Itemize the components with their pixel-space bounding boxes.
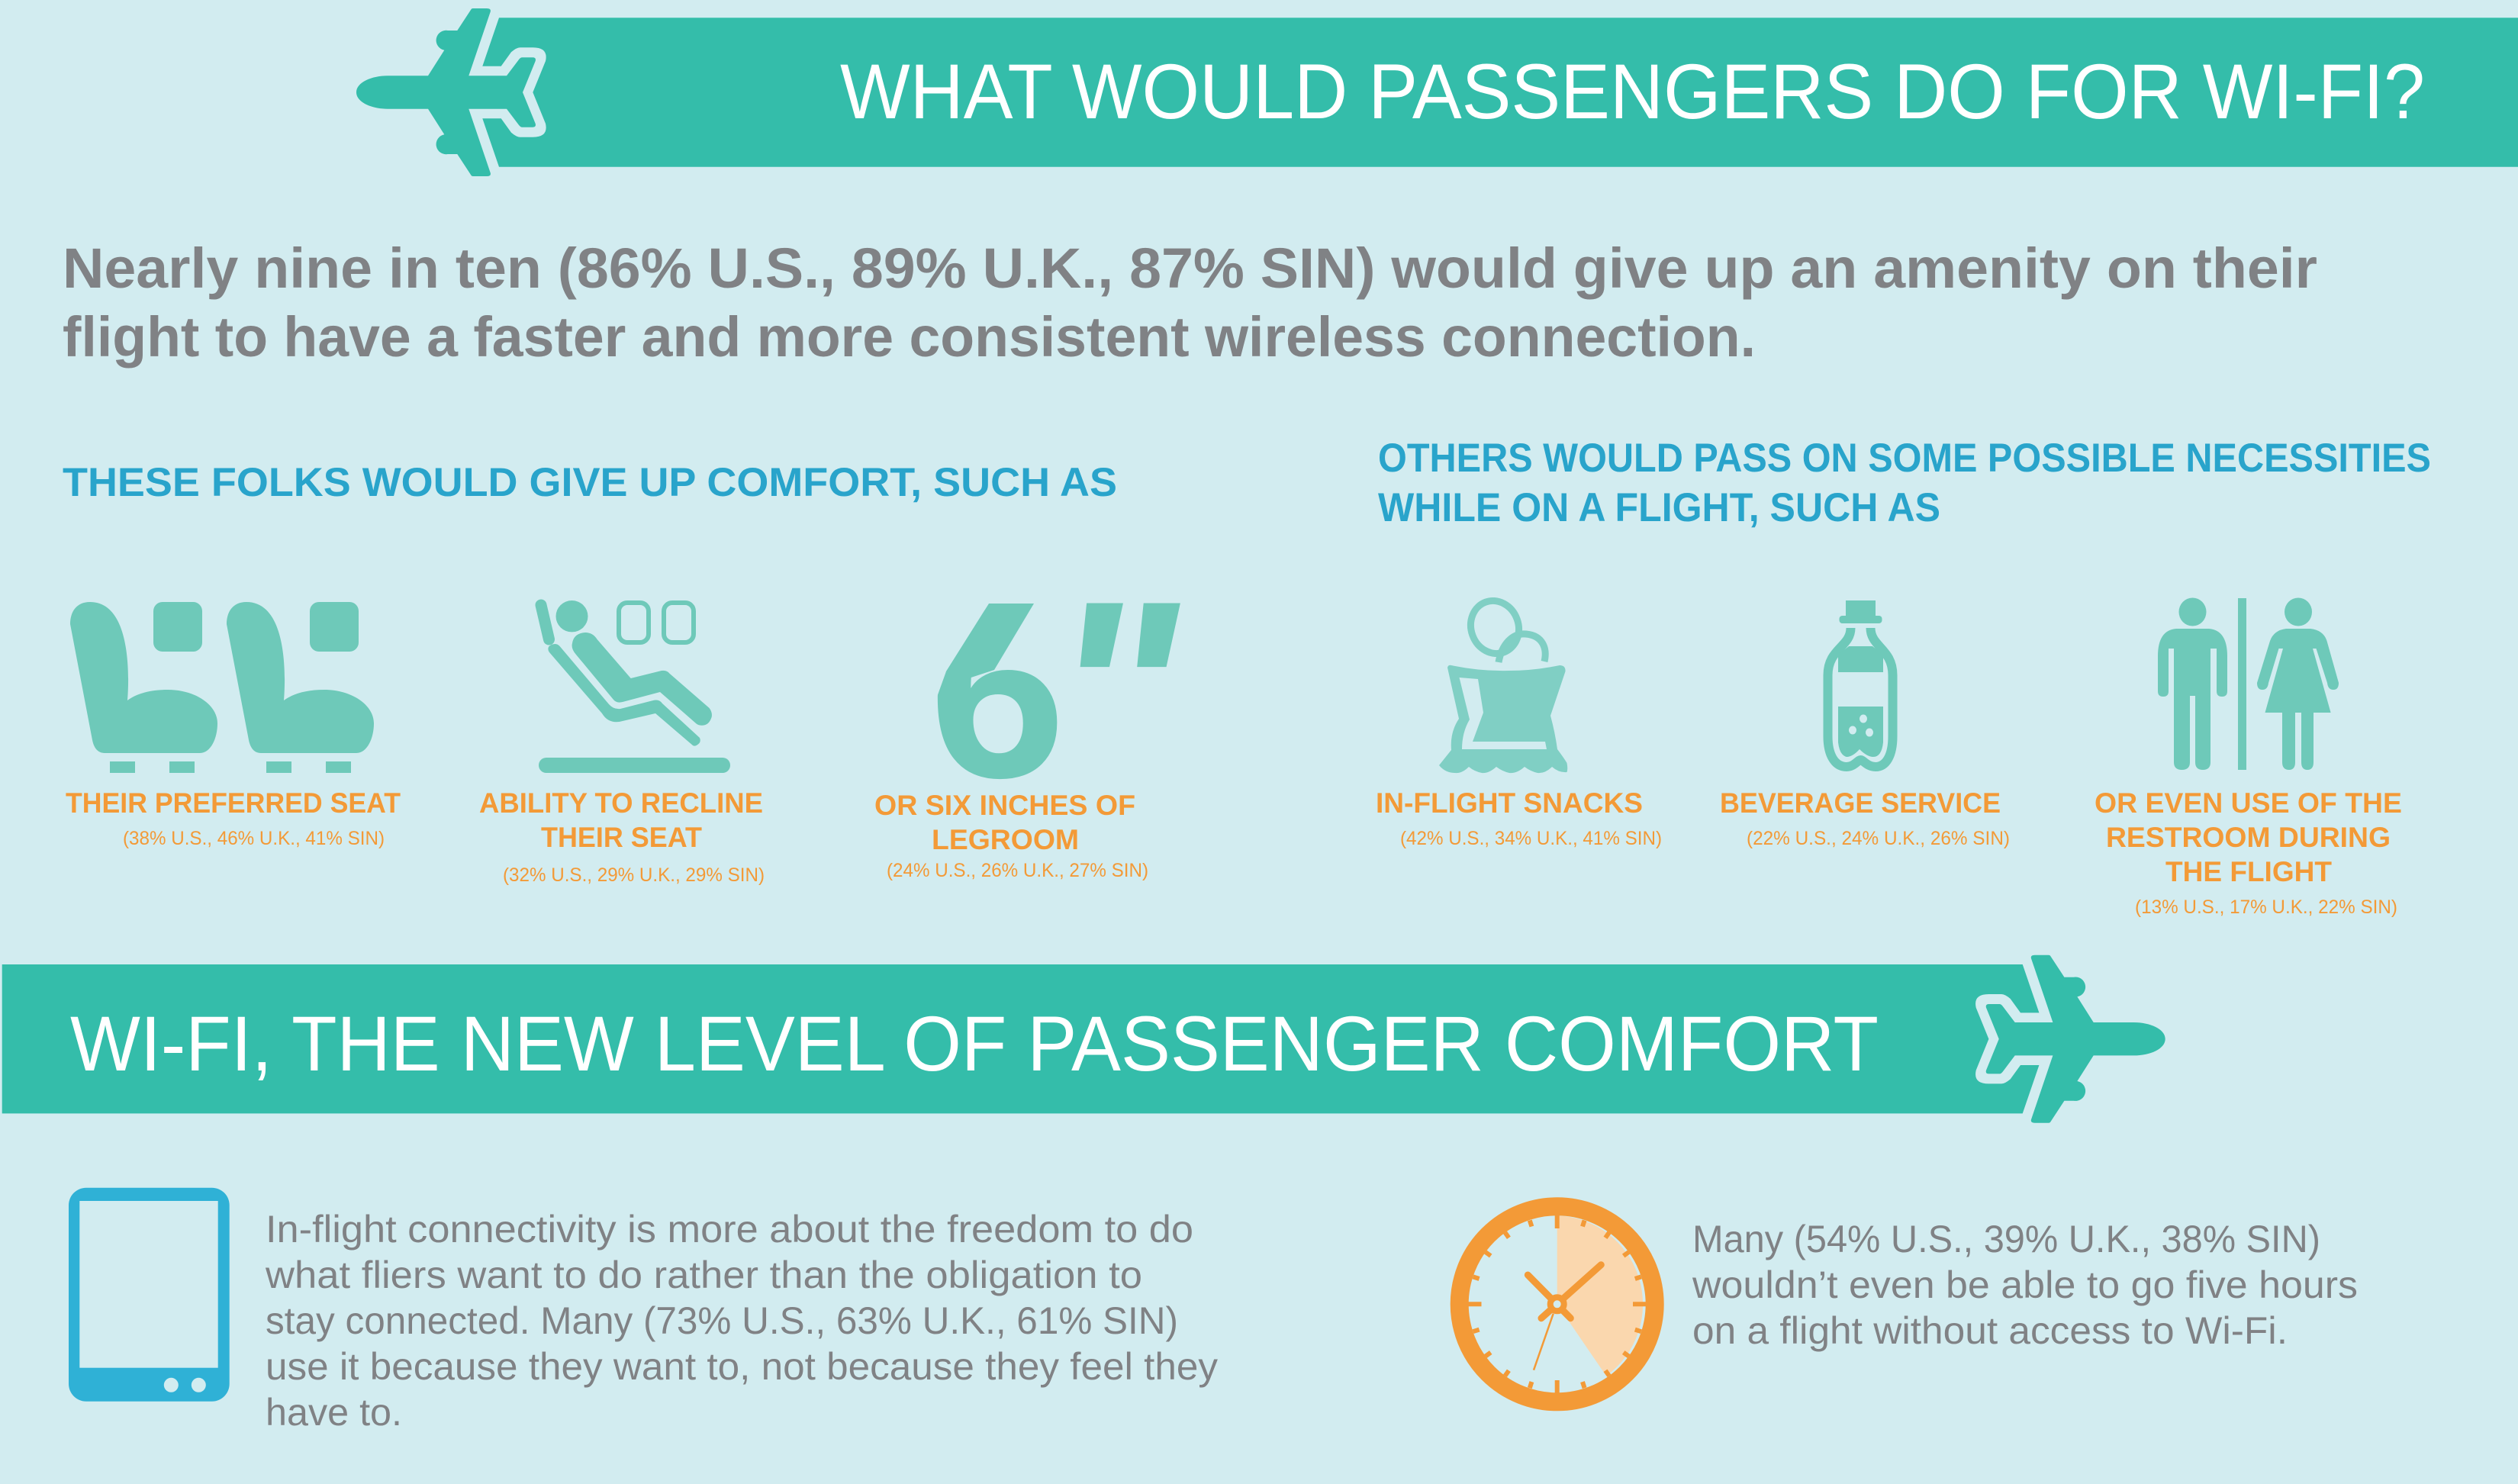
icon: reclined passenger <box>539 600 730 773</box>
banner ribbon <box>482 18 2518 167</box>
icon: clock <box>1460 1206 1655 1402</box>
icon: plane <box>356 8 536 176</box>
icon: six inches: " <box>1032 549 1207 834</box>
label: ABILITY TO RECLINE <box>479 787 763 819</box>
label <box>874 790 1135 855</box>
title: WHAT WOULD PASSENGERS DO FOR WI-FI? <box>840 48 2425 135</box>
text: freedom: use it because they want to, not because they feel they <box>266 1345 1218 1388</box>
stat: (38% U.S., 46% U.K., 41% SIN) <box>123 828 385 849</box>
intro text <box>63 237 2317 369</box>
label: LEGROOM <box>932 824 1079 855</box>
icon: six inches <box>908 549 1207 834</box>
item: snacks <box>1376 594 1662 849</box>
item: legroom <box>874 549 1207 881</box>
icon: man and woman <box>2158 598 2339 770</box>
icon: snack bag <box>1439 594 1567 773</box>
stat: (22% U.S., 24% U.K., 26% SIN) <box>1747 828 2010 849</box>
label: OR SIX INCHES OF <box>874 790 1135 821</box>
top banner with plane <box>356 8 2518 176</box>
stat: (32% U.S., 29% U.K., 29% SIN) <box>503 864 765 886</box>
label: BEVERAGE SERVICE <box>1720 787 2001 819</box>
heading: new level of comfort: WI-FI, THE NEW LEVEL OF PASSENGER COMFORT <box>70 1000 1879 1087</box>
text: freedom: what fliers want to do rather than the obligation to <box>265 1254 1142 1296</box>
icon: tablet <box>69 1188 230 1402</box>
icon: six inches: 6 <box>929 559 1066 828</box>
item: beverage <box>1720 600 2010 849</box>
label <box>479 787 763 853</box>
text: freedom: stay connected. Many (73% U.S., 63% U.K., 61% SIN) <box>266 1299 1178 1342</box>
icon: airplane seats <box>70 602 374 773</box>
heading: necessities: WHILE ON A FLIGHT, SUCH AS <box>1378 485 1940 530</box>
label: IN-FLIGHT SNACKS <box>1376 787 1643 819</box>
label: RESTROOM DURING <box>2106 822 2391 853</box>
text: five hours: Many (54% U.S., 39% U.K., 38% SIN) <box>1692 1218 2320 1260</box>
intro text: flight to have a faster and more consistent wireless connection. <box>63 305 1756 369</box>
text: freedom <box>265 1208 1218 1434</box>
heading: necessities <box>1378 436 2431 530</box>
second banner with plane <box>2 955 2165 1123</box>
banner ribbon <box>2 964 2039 1113</box>
label: THEIR SEAT <box>541 822 702 853</box>
heading: comfort: THESE FOLKS WOULD GIVE UP COMFORT, SUCH AS <box>63 460 1117 505</box>
item: preferred seat <box>66 602 401 849</box>
icon: bottle <box>1828 600 1892 767</box>
item: restroom <box>2095 598 2402 918</box>
stat: (13% U.S., 17% U.K., 22% SIN) <box>2135 897 2397 918</box>
text: freedom: have to. <box>266 1391 402 1434</box>
heading: necessities: OTHERS WOULD PASS ON SOME POSSIBLE NECESSITIES <box>1378 436 2431 481</box>
label: THE FLIGHT <box>2165 856 2332 887</box>
label <box>2095 787 2402 887</box>
stat: (24% U.S., 26% U.K., 27% SIN) <box>887 860 1148 881</box>
intro text: Nearly nine in ten (86% U.S., 89% U.K., 87% SIN) would give up an amenity on their <box>63 237 2317 300</box>
stat: (42% U.S., 34% U.K., 41% SIN) <box>1400 828 1662 849</box>
label: OR EVEN USE OF THE <box>2095 787 2402 819</box>
label: THEIR PREFERRED SEAT <box>66 787 401 819</box>
icon: plane <box>1986 955 2165 1123</box>
text: five hours: on a flight without access to Wi-Fi. <box>1692 1309 2288 1352</box>
item: recline <box>479 600 765 886</box>
text: five hours: wouldn’t even be able to go five hours <box>1692 1263 2358 1306</box>
text: five hours <box>1692 1218 2358 1352</box>
text: freedom: In-flight connectivity is more about the freedom to do <box>266 1208 1193 1251</box>
